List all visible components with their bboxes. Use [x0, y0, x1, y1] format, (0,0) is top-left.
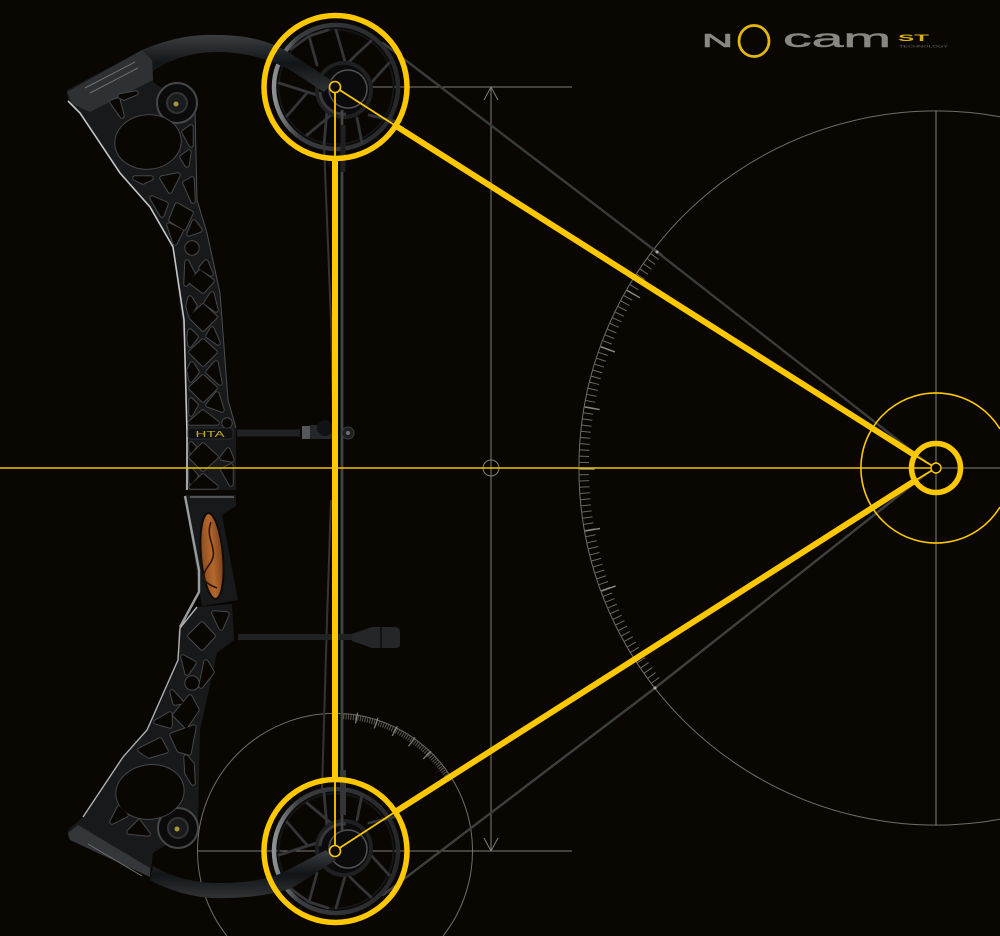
- bow grip with wood insert: [180, 495, 238, 627]
- icon: upper idler wheel: [157, 83, 197, 123]
- bow upper riser: [67, 50, 236, 490]
- HTA badge: [188, 428, 233, 439]
- yellow ring: top cam: [264, 16, 407, 158]
- big protractor circle: [579, 111, 1000, 825]
- yellow centre axis line: [0, 467, 936, 469]
- upper stabilizer with arrow rest: [237, 420, 354, 439]
- icon: top cam wheel: [274, 25, 398, 149]
- small protractor circle: [197, 713, 472, 936]
- logo: No Cam ST Technology: cam: [783, 25, 891, 53]
- lower stabilizer weight: [238, 627, 400, 648]
- icon: lower idler wheel: [158, 808, 198, 848]
- bow lower limb: [150, 850, 336, 898]
- bow string and cables: [322, 110, 343, 830]
- angled cables: [383, 43, 926, 895]
- guide lines and height dimension: [198, 87, 1000, 851]
- yellow ring: bottom cam: [264, 780, 407, 922]
- yellow rings: focal point: [861, 393, 1000, 543]
- logo: No Cam ST Technology: TECHNOLOGY: [899, 44, 949, 48]
- logo: No Cam ST Technology: N: [702, 31, 733, 51]
- logo: No Cam ST Technology: [702, 25, 949, 56]
- logo: No Cam ST Technology: ST: [898, 33, 929, 44]
- yellow geometry triangle: [335, 87, 936, 851]
- icon: bottom cam wheel: [274, 789, 398, 913]
- bow lower riser: [68, 604, 234, 877]
- HTA badge: HTA: [196, 430, 226, 439]
- bow upper limb: [142, 35, 334, 92]
